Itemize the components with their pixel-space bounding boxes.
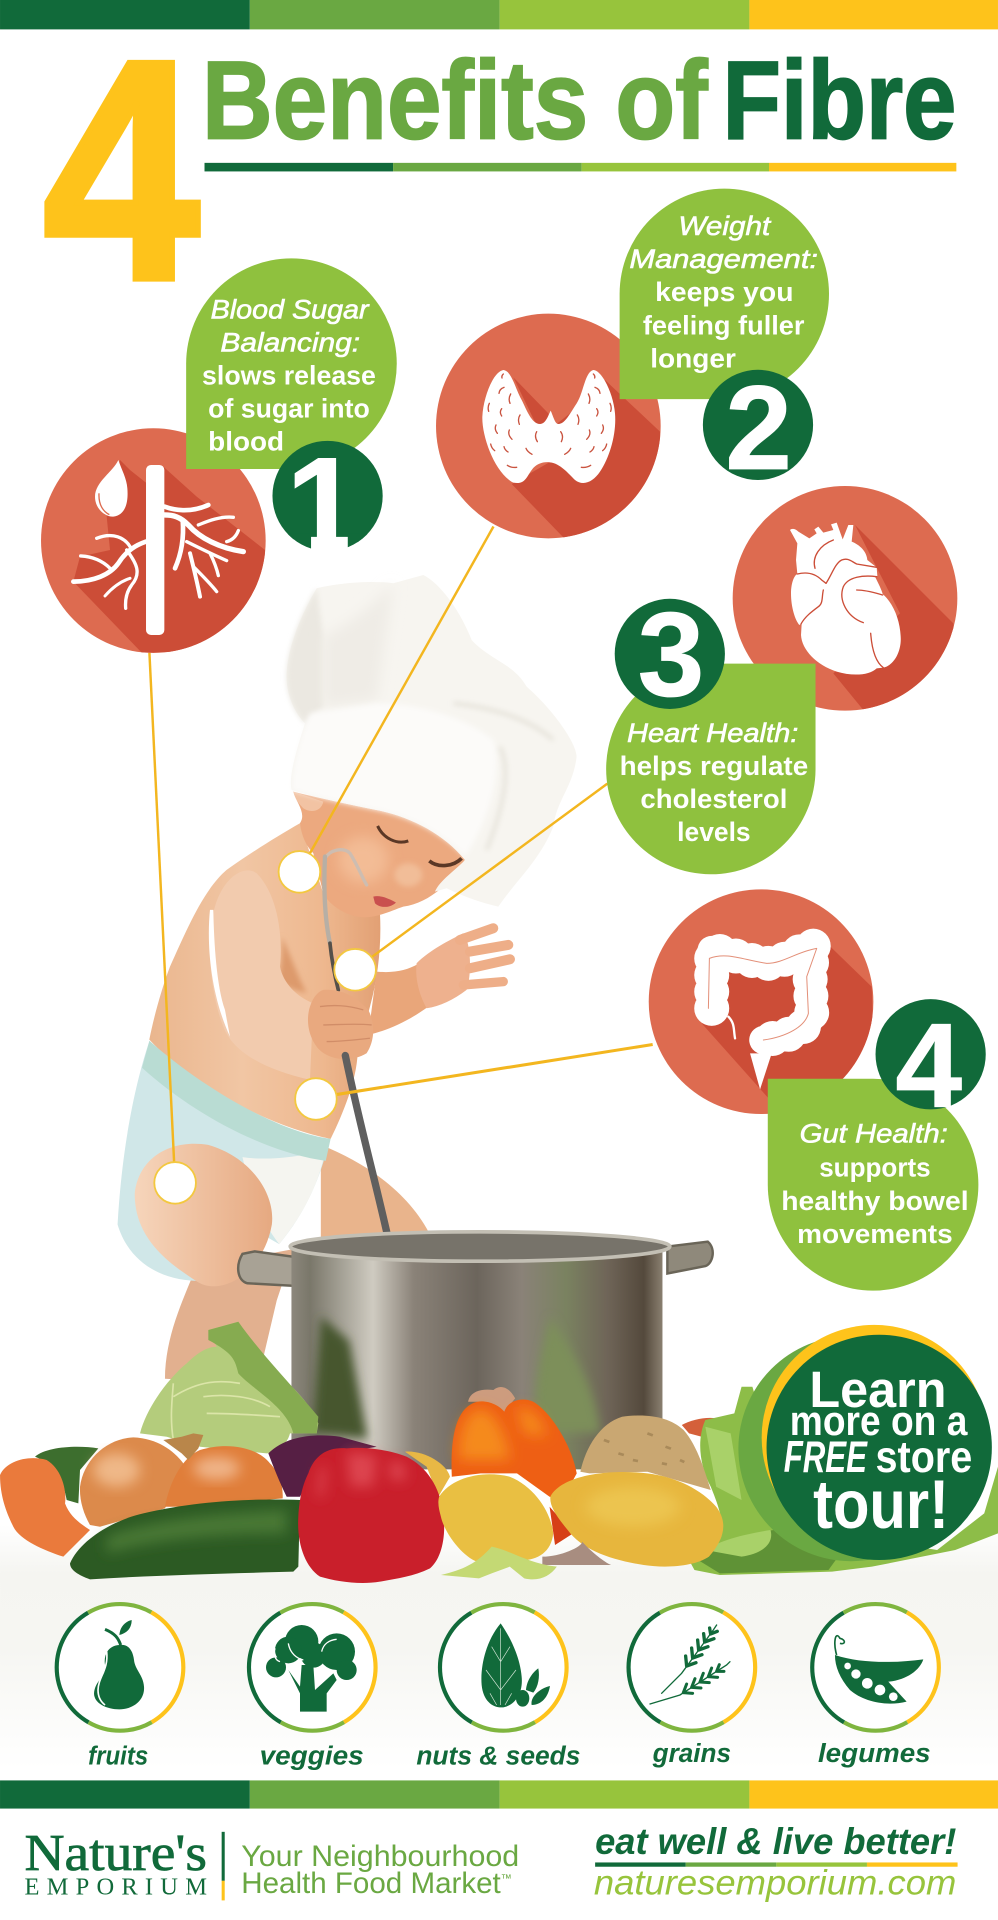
diaper waistband — [142, 1041, 331, 1161]
icon: pear — [94, 1620, 144, 1709]
panel: gut health — [649, 889, 986, 1291]
title — [43, 0, 956, 346]
right handle — [667, 1242, 713, 1273]
food group: legumes — [812, 1604, 939, 1768]
green reflections — [535, 1316, 600, 1433]
onion one highlight — [93, 1453, 140, 1487]
red bell pepper — [298, 1448, 444, 1583]
logo — [25, 1825, 225, 1900]
label: nuts & seeds — [416, 1742, 580, 1770]
logo wordmark: Nature's — [25, 1825, 207, 1882]
big number 4: 4 — [43, 0, 201, 346]
knuckle creases — [320, 1006, 372, 1042]
number 3 — [615, 588, 725, 722]
icon: broccoli — [266, 1625, 357, 1712]
leader line: weight — [310, 527, 493, 853]
bubble text: Weight — [678, 211, 772, 241]
label: veggies — [260, 1742, 364, 1770]
pepper lower — [550, 1507, 573, 1545]
number 1: 1 — [286, 429, 361, 580]
label: legumes — [818, 1740, 931, 1768]
ring — [440, 1604, 567, 1731]
ring — [812, 1604, 939, 1731]
marker dot — [334, 949, 376, 991]
speech bubble: longer — [650, 343, 736, 373]
onion two — [165, 1446, 283, 1507]
speech bubble — [768, 1079, 978, 1291]
red onion — [268, 1435, 377, 1497]
pot body — [291, 1244, 662, 1469]
website: naturesemporium.com — [594, 1862, 956, 1902]
number 2 — [703, 361, 813, 495]
ladle top — [324, 850, 367, 990]
number 4 — [876, 999, 986, 1133]
top colour bar — [0, 0, 998, 29]
ring — [629, 1604, 755, 1731]
logo subtitle: EMPORIUM — [25, 1873, 207, 1900]
number 4: 4 — [895, 999, 962, 1133]
vegetables right — [438, 1387, 998, 1579]
hat left panel — [287, 588, 323, 723]
hat pleats — [323, 583, 393, 707]
arm highlight — [209, 910, 230, 1037]
red fruit — [682, 1418, 716, 1437]
number 2: 2 — [725, 361, 792, 495]
cabbage — [140, 1322, 318, 1453]
panel: heart health — [606, 486, 960, 874]
callout: free store tour — [738, 1325, 992, 1561]
leader line: heart — [371, 784, 607, 958]
eye — [429, 858, 462, 866]
speech bubble: Management: — [629, 244, 818, 274]
near arm — [210, 870, 313, 1080]
leader line: blood sugar — [149, 653, 175, 1183]
yellow potato two — [550, 1472, 723, 1567]
marker dot — [295, 1078, 337, 1120]
pot rim — [290, 1232, 670, 1261]
potato highlight — [586, 1487, 680, 1527]
leader line: gut — [336, 1044, 653, 1095]
ring — [57, 1604, 183, 1731]
bubble text: Gut Health: — [800, 1118, 948, 1148]
food group: nuts and seeds — [416, 1604, 580, 1770]
panel: blood sugar balancing — [41, 258, 397, 653]
speech bubble: blood — [208, 427, 284, 457]
tagline: Your Neighbourhood — [241, 1840, 519, 1873]
pan edge — [542, 1542, 611, 1565]
bubble text: Heart Health: — [627, 718, 798, 748]
back cucumber — [35, 1447, 98, 1503]
vegetables left — [0, 1322, 450, 1583]
far hand — [416, 928, 510, 1008]
speech bubble: levels — [677, 817, 751, 847]
head — [293, 792, 465, 917]
hat side folds — [453, 703, 553, 850]
nose — [394, 863, 422, 887]
speech bubble: slows release — [202, 360, 376, 390]
face highlight — [338, 837, 388, 883]
thigh — [135, 1144, 272, 1286]
hat band — [292, 703, 497, 857]
marker dot — [279, 851, 320, 893]
far arm — [368, 964, 428, 1035]
icon: thyroid — [436, 314, 663, 540]
icon: wheat — [650, 1625, 730, 1704]
back leg — [321, 1145, 431, 1243]
cooking pot — [238, 1232, 713, 1469]
tagline: Health Food Market — [241, 1867, 499, 1900]
onion two highlight — [193, 1457, 240, 1480]
orange pepper highlight — [459, 1407, 546, 1460]
onion one — [80, 1437, 183, 1527]
callout: free store tour: more on a — [790, 1397, 968, 1444]
cucumber highlight — [107, 1510, 287, 1553]
pepper stem — [468, 1387, 515, 1412]
ring — [249, 1604, 376, 1731]
title emphasis: Fibre — [722, 37, 956, 162]
speech bubble: supports — [819, 1153, 931, 1183]
yellow potato one — [438, 1474, 553, 1562]
title underline — [205, 163, 956, 171]
cabbage ribs — [171, 1382, 280, 1440]
bubble text: Blood Sugar — [211, 294, 370, 324]
food group: grains — [629, 1604, 755, 1768]
food group: veggies — [249, 1604, 376, 1770]
cabbage outer leaf — [208, 1322, 318, 1433]
lettuce shade — [698, 1530, 836, 1573]
speech bubble: helps regulate — [620, 751, 808, 781]
slogan: eat well & live better! — [595, 1821, 956, 1862]
icon: colon — [649, 889, 875, 1114]
baby chef photo — [118, 575, 577, 1384]
upper body traced — [149, 575, 577, 1139]
pale leaf — [441, 1547, 557, 1579]
icon: pea pod — [835, 1636, 923, 1704]
orange pepper — [452, 1399, 577, 1500]
title words: Benefits of — [202, 37, 709, 162]
callout text: Learn — [809, 1360, 947, 1418]
label: fruits — [88, 1742, 148, 1770]
speech bubble: movements — [797, 1219, 953, 1249]
speech bubble: healthy bowel — [781, 1186, 969, 1216]
mouth — [373, 896, 396, 907]
speech bubble: of sugar into — [208, 394, 370, 424]
floor reflection — [0, 1524, 998, 1769]
pepper highlights — [317, 1452, 407, 1497]
ladle lower — [345, 1056, 389, 1244]
lettuce light leaf — [705, 1427, 771, 1557]
slogan underline — [595, 1862, 958, 1867]
logo divider — [222, 1832, 225, 1881]
speech bubble — [620, 189, 829, 399]
tagline — [241, 1840, 519, 1900]
icon: heart — [733, 486, 960, 711]
brown potato — [580, 1415, 711, 1490]
eye — [378, 826, 408, 842]
speech bubble — [606, 664, 816, 874]
speech bubble: cholesterol — [640, 784, 787, 814]
tagline: ™ — [501, 1873, 512, 1885]
food group: fruits — [57, 1604, 183, 1770]
speech bubble: Balancing: — [220, 327, 360, 357]
potato speckles — [604, 1433, 684, 1464]
number 1 — [272, 440, 383, 548]
number 3: 3 — [638, 588, 704, 722]
diaper — [118, 1041, 328, 1281]
cucumber — [70, 1499, 300, 1579]
label: grains — [652, 1740, 731, 1768]
hand on ladle — [308, 990, 373, 1059]
lettuce — [691, 1387, 998, 1575]
speech bubble: keeps you — [655, 277, 793, 307]
ear — [293, 792, 323, 811]
small yellow vegetable — [405, 1452, 450, 1497]
speech bubble — [186, 258, 397, 469]
left handle — [238, 1251, 343, 1288]
diaper front — [242, 1149, 326, 1244]
torso — [149, 823, 380, 1139]
onion stem — [163, 1433, 203, 1460]
chef hat — [287, 575, 577, 907]
lower leg — [165, 1249, 294, 1384]
callout: free store tour: tour! — [813, 1466, 949, 1543]
carrot — [0, 1458, 90, 1557]
bottom colour bar — [0, 1780, 998, 1809]
callout: free store tour: store — [876, 1433, 972, 1482]
chest shadow — [278, 937, 307, 993]
speech bubble: feeling fuller — [643, 310, 805, 340]
marker dot — [154, 1162, 196, 1204]
panel: weight management — [436, 189, 829, 540]
divider accent — [222, 1881, 225, 1900]
callout: free store tour: FREE — [784, 1433, 868, 1482]
icon: blood vessels — [41, 428, 266, 653]
icon: almond and leaves — [481, 1623, 550, 1707]
